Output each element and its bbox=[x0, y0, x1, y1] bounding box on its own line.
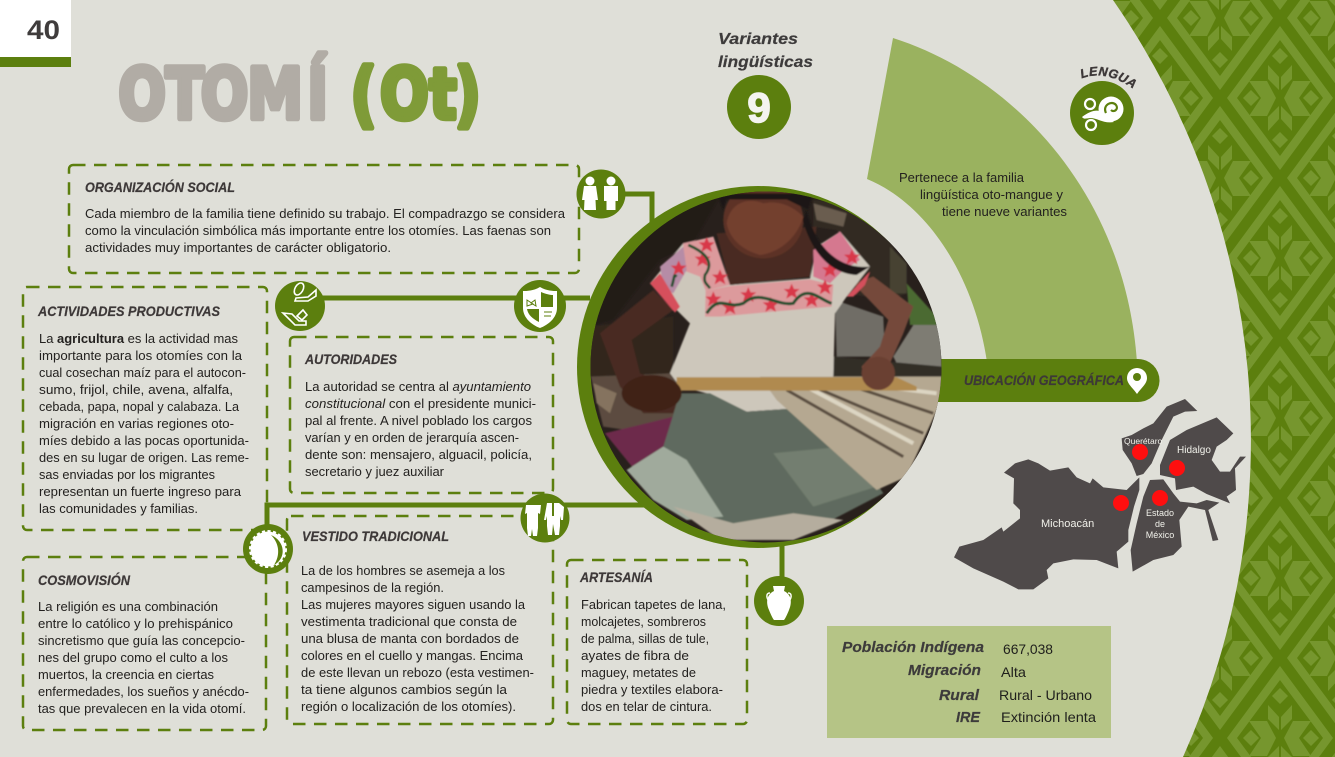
icon: shield bbox=[514, 280, 566, 332]
panel: cosmovisión: sincretismo que guía las concepcio- bbox=[38, 633, 245, 648]
panel: cosmovisión: COSMOVISIÓN bbox=[38, 571, 131, 588]
panel: actividades productivas: importante para los otomíes con la bbox=[39, 348, 243, 363]
connector lines bbox=[267, 194, 782, 580]
panel: vestido tradicional: campesinos de la región. bbox=[301, 580, 444, 595]
panel: artesanía: maguey, metates de bbox=[581, 665, 696, 680]
map: ubicación: Hidalgo bbox=[1177, 445, 1211, 456]
panel: lengua wedge bbox=[867, 38, 1137, 362]
panel: actividades productivas bbox=[23, 287, 267, 530]
title: (Ot) bbox=[351, 55, 481, 136]
panel: artesanía: molcajetes, sombreros bbox=[581, 614, 706, 629]
icon: clothing bbox=[520, 494, 570, 542]
panel: datos: Alta bbox=[1001, 664, 1026, 680]
panel: artesanía: de palma, sillas de tule, bbox=[581, 631, 709, 646]
panel: datos: Rural bbox=[939, 688, 980, 704]
woven pattern band bbox=[1113, 0, 1335, 757]
map: ubicación: de bbox=[1155, 519, 1165, 529]
panel: actividades productivas: cebada, papa, nopal y calabaza. La bbox=[39, 399, 240, 414]
panel: organización social: actividades muy importantes de carácter obligatorio. bbox=[85, 240, 391, 255]
page number tab: 40 bbox=[27, 15, 60, 45]
ubicación geográfica bar bbox=[930, 359, 1160, 402]
map: ubicación: Michoacán bbox=[1041, 518, 1094, 530]
panel: vestido tradicional: de este llevan un rebozo (esta vestimen- bbox=[301, 665, 534, 680]
variantes lingüísticas: 9 bbox=[747, 84, 771, 131]
panel: autoridades: AUTORIDADES bbox=[304, 351, 398, 367]
panel: actividades productivas: ACTIVIDADES PRODUCTIVAS bbox=[37, 303, 221, 319]
panel: autoridades bbox=[290, 337, 553, 493]
map: ubicación: México bbox=[1146, 530, 1174, 540]
photo ring bbox=[577, 186, 939, 548]
panel: vestido tradicional: colores en el cuello y mangas. Encima bbox=[301, 648, 524, 663]
panel: cosmovisión: entre lo católico y lo prehispánico bbox=[38, 616, 233, 631]
panel: cosmovisión: tas que prevalecen en la vida otomí. bbox=[38, 701, 246, 716]
map: ubicación: Estado bbox=[1146, 508, 1174, 518]
panel: vestido tradicional: región o localización de los otomíes). bbox=[301, 699, 516, 714]
panel: actividades productivas: míes debido a las pocas oportunida- bbox=[39, 433, 249, 448]
icon: hands bbox=[275, 281, 325, 331]
photo: woman weaving bbox=[585, 182, 947, 545]
panel: organización social bbox=[69, 165, 579, 273]
map: ubicación: Querétaro bbox=[1124, 436, 1163, 446]
icon: lengua: LENGUA bbox=[1080, 66, 1136, 88]
panel: actividades productivas: cual cosechan maíz para el autocon- bbox=[39, 365, 246, 380]
panel: lengua wedge: tiene nueve variantes bbox=[942, 204, 1067, 219]
panel: datos bbox=[827, 626, 1111, 738]
panel: artesanía: dos en telar de cintura. bbox=[581, 699, 712, 714]
panel: datos: Extinción lenta bbox=[1001, 709, 1096, 725]
panel: artesanía: piedra y textiles elabora- bbox=[581, 682, 723, 697]
panel: cosmovisión: muertos, la creencia en ciertas bbox=[38, 667, 214, 682]
panel: cosmovisión: La religión es una combinación bbox=[38, 599, 218, 614]
panel: vestido tradicional: Las mujeres mayores siguen usando la bbox=[301, 597, 526, 612]
panel: organización social: como la vinculación simbólica más importante entre los otomíes. Las faenas son bbox=[85, 223, 551, 238]
panel: vestido tradicional: ta tiene algunos cambios según la bbox=[301, 682, 508, 697]
icon: people bbox=[576, 170, 626, 218]
page number tab bbox=[0, 0, 71, 67]
panel: actividades productivas: des en su lugar de origen. Las reme- bbox=[39, 450, 249, 465]
panel: datos: Migración bbox=[908, 663, 981, 679]
panel: autoridades: La autoridad se centra al ayuntamiento bbox=[305, 379, 531, 394]
title: OTOMÍ bbox=[118, 52, 328, 135]
title bbox=[118, 52, 481, 136]
panel: cosmovisión: enfermedades, los sueños y anécdo- bbox=[38, 684, 249, 699]
panel: lengua wedge: lingüística oto-mangue y bbox=[920, 187, 1063, 202]
panel: artesanía: ayates de fibra de bbox=[581, 648, 689, 663]
panel: actividades productivas: La agricultura es la actividad mas bbox=[39, 331, 238, 346]
panel: datos: IRE bbox=[956, 710, 981, 726]
panel: vestido tradicional: VESTIDO TRADICIONAL bbox=[302, 528, 449, 544]
panel: cosmovisión: nes del grupo como el culto a los bbox=[38, 650, 228, 665]
panel: autoridades: dente son: mensajero, alguacil, policía, bbox=[305, 447, 532, 462]
panel: organización social: ORGANIZACIÓN SOCIAL bbox=[85, 178, 235, 195]
panel: cosmovisión bbox=[23, 557, 266, 730]
panel: vestido tradicional: vestimenta tradicional que consta de bbox=[301, 614, 517, 629]
panel: autoridades: secretario y juez auxiliar bbox=[305, 464, 445, 479]
panel: actividades productivas: las comunidades y familias. bbox=[39, 501, 198, 516]
panel: organización social: Cada miembro de la familia tiene definido su trabajo. El compadrazgo se considera bbox=[85, 206, 566, 221]
panel: autoridades: pal al frente. A nivel poblado los cargos bbox=[305, 413, 533, 428]
panel: datos: Rural - Urbano bbox=[999, 687, 1092, 703]
map: ubicación bbox=[954, 399, 1246, 589]
panel: actividades productivas: migración en varias regiones oto- bbox=[39, 416, 234, 431]
icon: sun and moon bbox=[243, 524, 293, 574]
panel: actividades productivas: representan un fuerte ingreso para bbox=[39, 484, 242, 499]
icon: lengua bbox=[1070, 66, 1136, 145]
variantes lingüísticas: Variantes bbox=[718, 31, 798, 48]
panel: actividades productivas: sas enviadas por los migrantes bbox=[39, 467, 215, 482]
panel: artesanía: ARTESANÍA bbox=[579, 569, 653, 585]
variantes lingüísticas: lingüísticas bbox=[718, 54, 813, 71]
panel: vestido tradicional: una blusa de manta con bordados de bbox=[301, 631, 519, 646]
panel: actividades productivas: sumo, frijol, chile, avena, alfalfa, bbox=[39, 382, 233, 397]
panel: vestido tradicional bbox=[287, 516, 553, 724]
panel: vestido tradicional: La de los hombres se asemeja a los bbox=[301, 563, 505, 578]
variantes lingüísticas bbox=[718, 31, 813, 139]
panel: autoridades: constitucional con el presidente munici- bbox=[305, 396, 536, 411]
panel: datos: Población Indígena bbox=[842, 640, 984, 656]
panel: artesanía: Fabrican tapetes de lana, bbox=[581, 597, 726, 612]
icon: jar bbox=[754, 576, 804, 626]
panel: artesanía bbox=[567, 560, 747, 724]
panel: autoridades: varían y en orden de jerarquía ascen- bbox=[305, 430, 519, 445]
panel: datos: 667,038 bbox=[1003, 641, 1053, 657]
panel: lengua wedge: Pertenece a la familia bbox=[899, 170, 1025, 185]
ubicación geográfica bar: UBICACIÓN GEOGRÁFICA bbox=[964, 371, 1124, 388]
